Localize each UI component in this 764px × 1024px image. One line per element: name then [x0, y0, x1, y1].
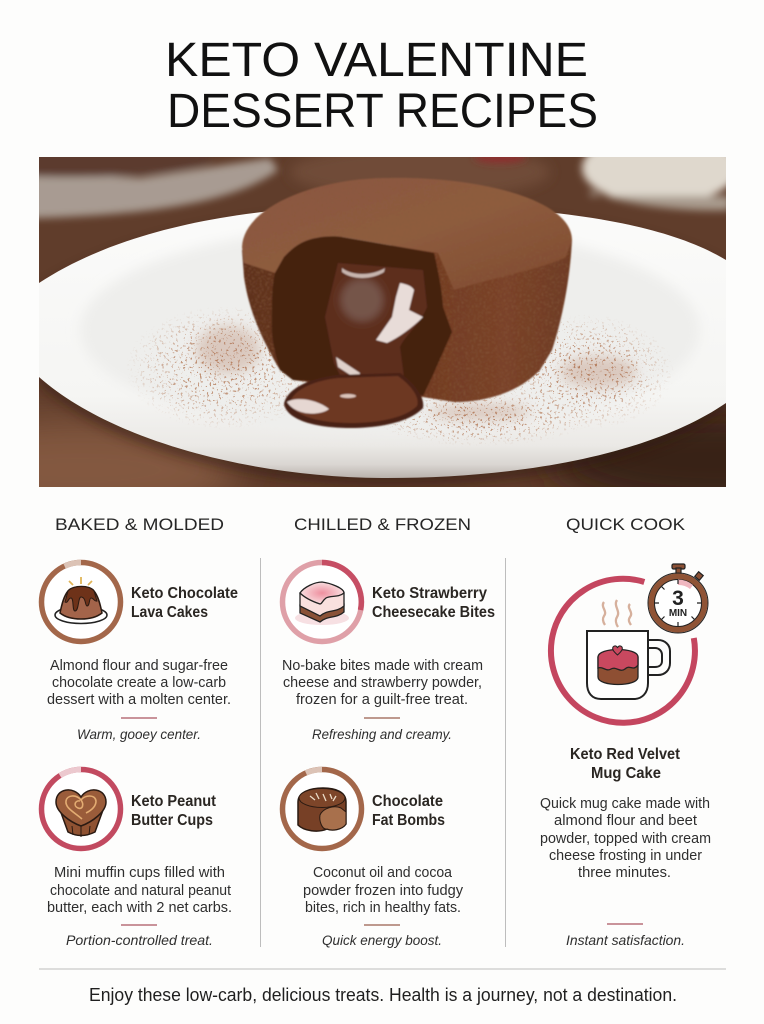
recipe title: Keto Red Velvet [570, 746, 680, 763]
title: DESSERT RECIPES [167, 85, 598, 138]
tagline: Warm, gooey center. [77, 726, 201, 742]
recipe title: Keto Peanut [131, 793, 216, 810]
description: powder frozen into fudgy [303, 883, 464, 899]
recipe title: Chocolate [372, 793, 443, 810]
icon: heart peanut butter cup [42, 770, 120, 848]
description [47, 865, 232, 916]
recipe title: Keto Strawberry [372, 585, 487, 602]
recipe title: Lava Cakes [131, 604, 208, 621]
description: cheese frosting in under [549, 848, 702, 864]
description: Mini muffin cups filled with [54, 865, 225, 881]
tagline: Portion-controlled treat. [66, 932, 213, 948]
cake body [242, 240, 572, 402]
icon: lava cake [42, 562, 120, 642]
icon: 3 minute stopwatch: MIN [669, 608, 687, 619]
description: three minutes. [578, 865, 671, 881]
description: Coconut oil and cocoa [313, 865, 453, 881]
footer message: Enjoy these low-carb, delicious treats. Health is a journey, not a destination. [89, 985, 677, 1005]
tagline: Quick energy boost. [322, 932, 442, 948]
description: Quick mug cake made with [540, 796, 710, 812]
recipe title [570, 746, 680, 782]
recipe title: Butter Cups [131, 812, 213, 829]
description: powder, topped with cream [540, 831, 711, 847]
icon: cheesecake bite [282, 562, 362, 642]
recipe title [131, 793, 216, 829]
panel: keto red velvet mug cake [540, 564, 711, 948]
description: almond flour and beet [554, 813, 697, 829]
description [282, 658, 483, 708]
description: frozen for a guilt-free treat. [296, 692, 468, 708]
recipe title [131, 585, 238, 621]
description: No-bake bites made with cream [282, 658, 483, 674]
icon: fat bomb [282, 770, 362, 848]
description [540, 796, 711, 881]
column heading: baked and molded: BAKED & MOLDED [55, 515, 224, 534]
recipe title: Fat Bombs [372, 812, 445, 829]
recipe title: Cheesecake Bites [372, 604, 495, 621]
hero photo: chocolate lava cake [39, 157, 726, 487]
description: cheese and strawberry powder, [283, 675, 482, 691]
description [303, 865, 464, 916]
panel: keto chocolate lava cakes [42, 562, 238, 742]
title: KETO VALENTINE [165, 34, 588, 87]
panel: keto strawberry cheesecake bites [282, 562, 495, 742]
recipe title [372, 585, 495, 621]
panel: keto peanut butter cups [42, 770, 232, 948]
icon: 3 minute stopwatch: 3 [672, 587, 684, 610]
icon: mug cake with ring and timer [551, 564, 708, 723]
column heading: quick cook: QUICK COOK [566, 515, 686, 534]
title [165, 34, 598, 138]
cake crown [242, 178, 572, 290]
column heading: chilled and frozen: CHILLED & FROZEN [294, 515, 471, 534]
description: chocolate and natural peanut [50, 883, 231, 899]
icon: 3 minute stopwatch [648, 564, 708, 633]
description: bites, rich in healthy fats. [305, 900, 461, 916]
bite interior [272, 236, 452, 396]
description [47, 658, 231, 708]
description: Almond flour and sugar-free [50, 658, 228, 674]
description: chocolate create a low-carb [52, 675, 226, 691]
panel: chocolate fat bombs [282, 770, 464, 948]
recipe title: Mug Cake [591, 765, 661, 782]
tagline: Refreshing and creamy. [312, 726, 452, 742]
molten centre [325, 263, 427, 385]
molten drip [284, 373, 423, 428]
description: dessert with a molten center. [47, 692, 231, 708]
description: butter, each with 2 net carbs. [47, 900, 232, 916]
tagline: Instant satisfaction. [566, 932, 685, 948]
recipe title: Keto Chocolate [131, 585, 238, 602]
recipe title [372, 793, 445, 829]
